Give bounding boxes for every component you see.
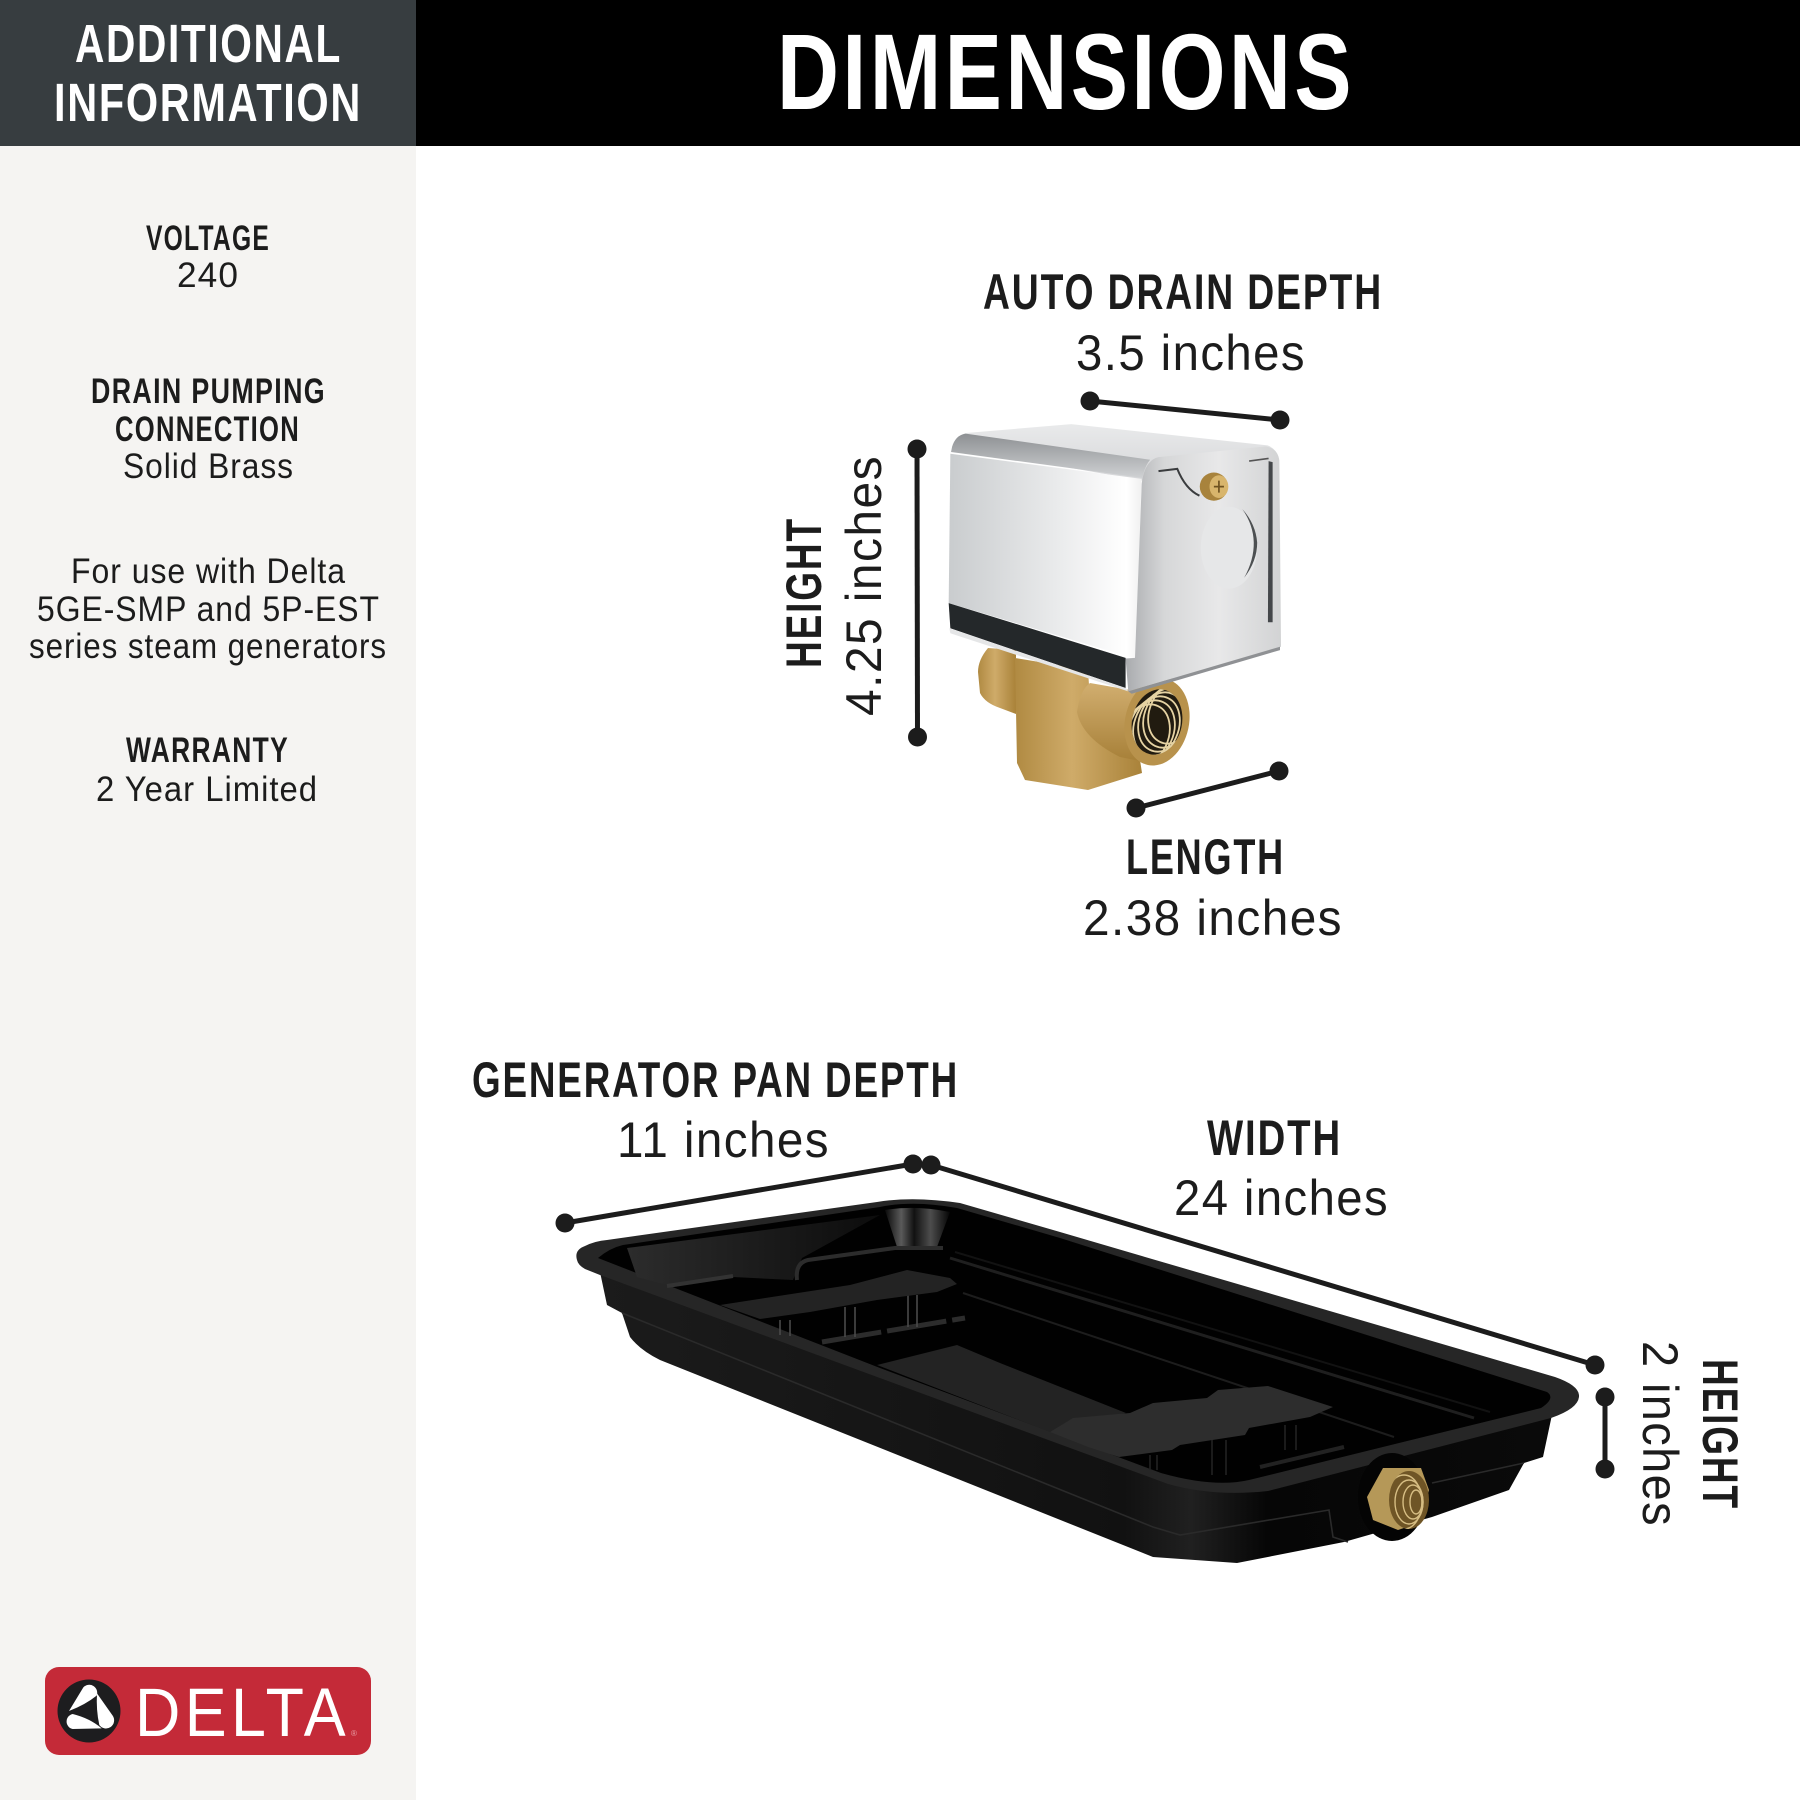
arrow: length line (1126, 762, 1288, 818)
spec: compatibility note: 5GE-SMP and 5P-EST (37, 590, 380, 629)
pan rim (576, 1199, 1579, 1493)
spec: compatibility note: For use with Delta (71, 552, 346, 591)
label: height: 4.25 inches (836, 455, 892, 716)
pan interior (598, 1204, 1550, 1483)
sidebar header: INFORMATION (54, 73, 362, 133)
spec: drain pumping connection (91, 372, 326, 486)
pan funnel highlight (885, 1208, 950, 1247)
label: length (1083, 829, 1343, 946)
spec: drain pumping connection: CONNECTION (115, 410, 300, 449)
label: generator pan depth: 11 inches (617, 1112, 830, 1168)
spec: warranty (96, 731, 318, 809)
shelf stilts (1150, 1425, 1344, 1475)
sidebar header (0, 0, 416, 146)
arrow: pan depth line (556, 1154, 922, 1232)
label: height: HEIGHT (776, 517, 832, 668)
spec: drain pumping connection: DRAIN PUMPING (91, 372, 326, 411)
valve brass body (978, 648, 1210, 790)
arrow: depth line (1080, 392, 1290, 430)
panel: additional information sidebar (0, 0, 416, 1800)
spec: warranty: 2 Year Limited (96, 770, 318, 809)
valve cover (949, 424, 1281, 694)
label: width (1174, 1110, 1389, 1226)
arrow: pan width line (922, 1156, 1604, 1374)
label: pan height: 2 inches (1632, 1341, 1688, 1527)
spec: voltage: 240 (177, 256, 239, 295)
pan body (600, 1272, 1553, 1563)
sidebar header: ADDITIONAL (75, 14, 342, 74)
label: pan height (1632, 1341, 1748, 1527)
arrow: height line (908, 440, 927, 746)
icon: generator pan (576, 1199, 1579, 1563)
shelf right (1050, 1386, 1333, 1457)
panel: auto drain dimensions (776, 264, 1383, 946)
shelf left (720, 1270, 957, 1319)
label: auto drain depth: 3.5 inches (1076, 325, 1306, 381)
label: length: LENGTH (1126, 829, 1285, 885)
icon: auto drain valve (949, 424, 1281, 790)
label: auto drain depth: AUTO DRAIN DEPTH (983, 264, 1383, 320)
pan body step (622, 1313, 1524, 1542)
pan floor (877, 1345, 1126, 1432)
pan ridges (667, 1248, 1490, 1437)
label: width: 24 inches (1174, 1170, 1389, 1226)
pan inner wedge (627, 1215, 880, 1285)
spec: drain pumping connection: Solid Brass (123, 447, 294, 486)
label: width: WIDTH (1207, 1110, 1342, 1166)
spec: compatibility note (29, 552, 387, 666)
label: generator pan depth: GENERATOR PAN DEPTH (472, 1052, 959, 1108)
spec: voltage: VOLTAGE (146, 219, 270, 258)
label: auto drain depth (983, 264, 1383, 381)
spec: voltage (146, 219, 270, 295)
logo: Delta: DELTA (135, 1674, 350, 1751)
title bar: DIMENSIONS (777, 11, 1355, 132)
logo: Delta: ® (351, 1729, 357, 1738)
label: height (776, 455, 892, 716)
title bar (416, 0, 1800, 146)
label: pan height: HEIGHT (1692, 1359, 1748, 1510)
arrow: pan height line (1596, 1388, 1614, 1478)
brass drain fitting (1367, 1453, 1429, 1541)
logo: Delta (45, 1667, 371, 1755)
label: generator pan depth (472, 1052, 959, 1168)
label: length: 2.38 inches (1083, 890, 1343, 946)
panel: generator pan dimensions (472, 1052, 1748, 1563)
spec: compatibility note: series steam generators (29, 627, 387, 666)
spec: warranty: WARRANTY (126, 731, 289, 770)
